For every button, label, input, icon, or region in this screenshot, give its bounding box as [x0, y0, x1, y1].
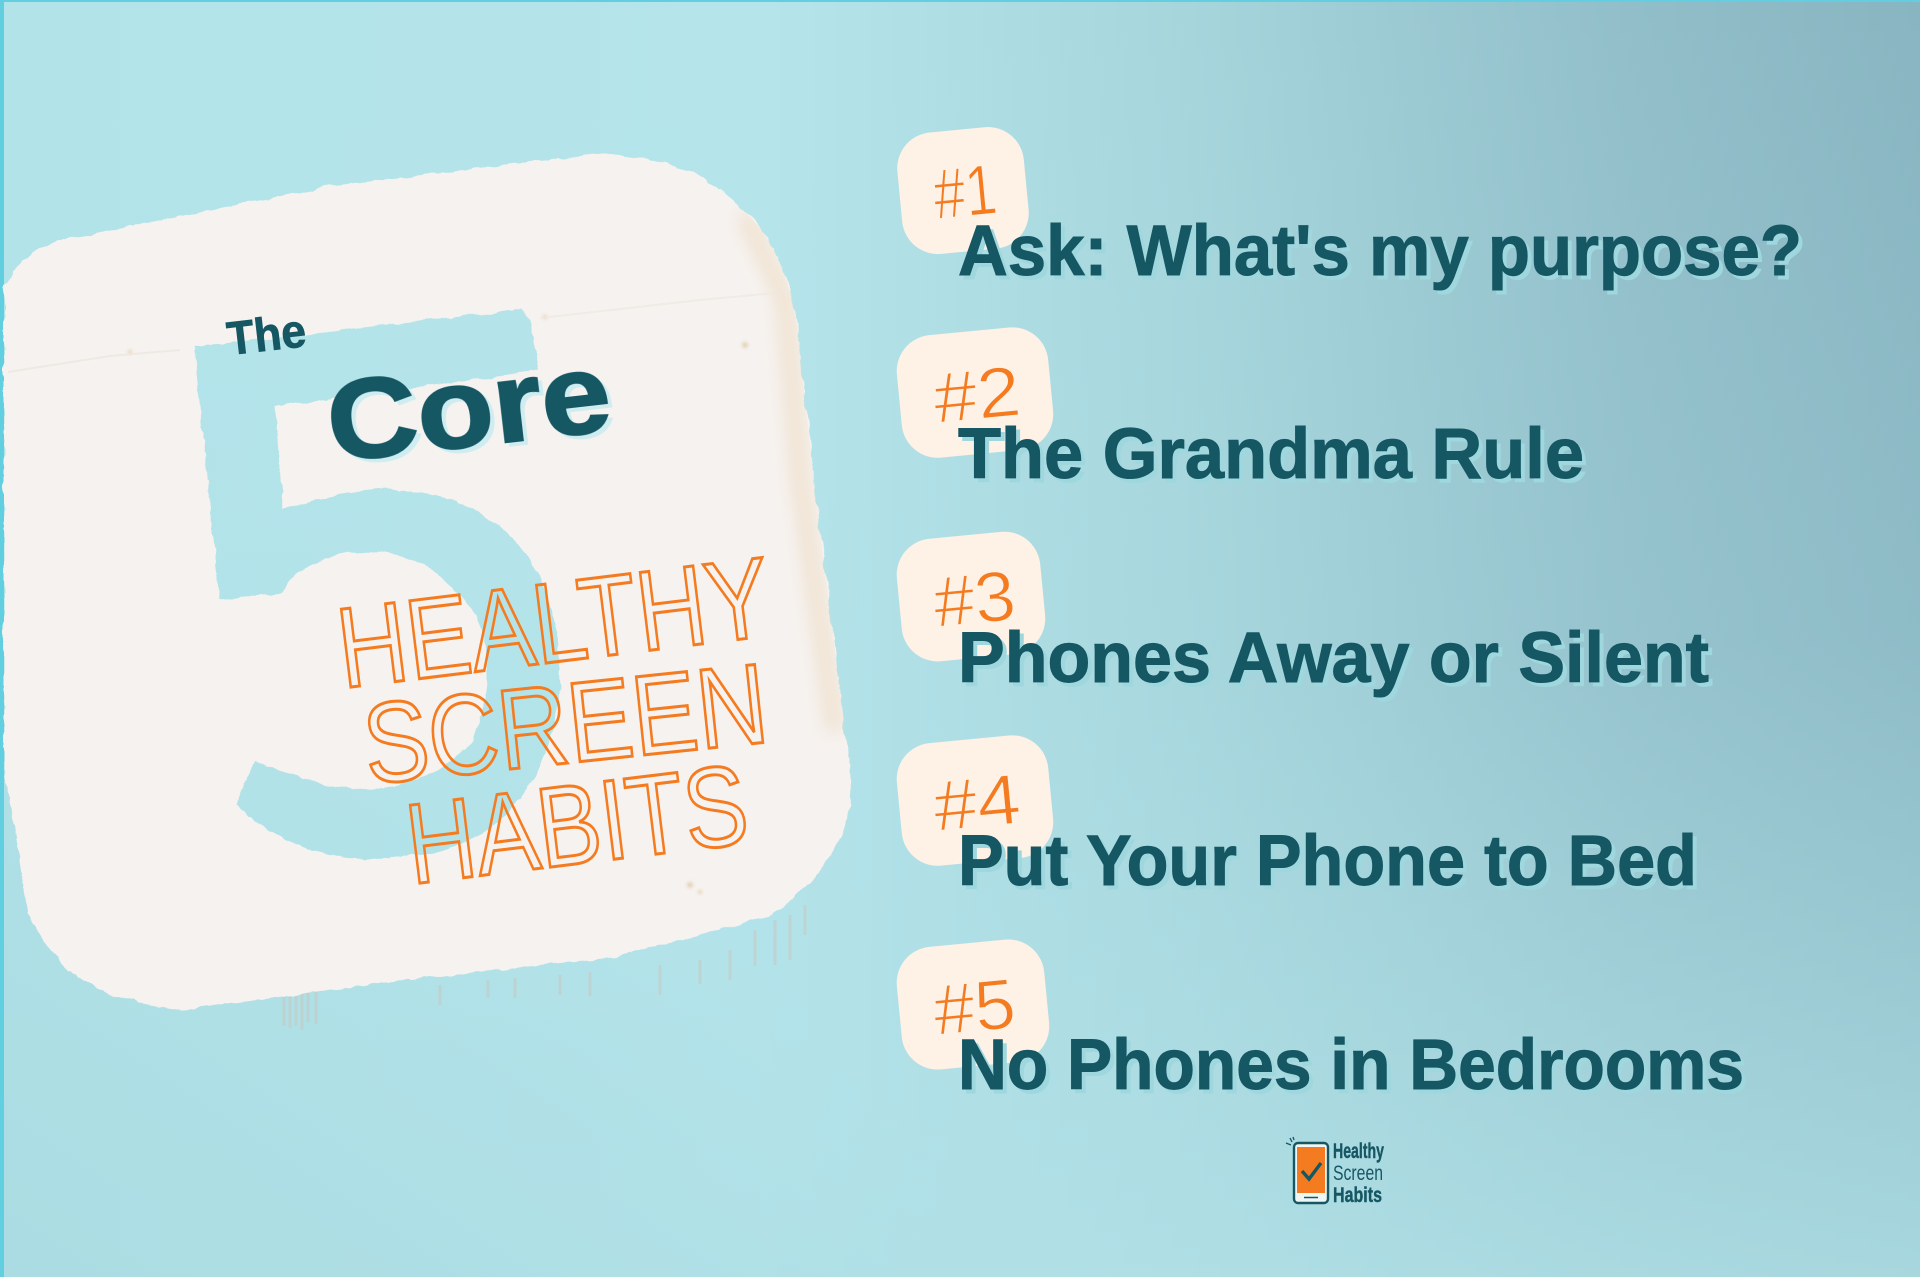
number 3: #3: [930, 556, 1019, 643]
heading: Healthy Screen Habits: [331, 534, 777, 909]
number 2: #2: [930, 352, 1024, 439]
icon: phone with check: [1286, 1137, 1328, 1203]
white block with stencilled five: [4, 153, 851, 1010]
logo text: Healthy: [1333, 1140, 1384, 1163]
heading: Healthy Screen Habits: HEALTHY: [331, 534, 777, 713]
habit 1: [894, 124, 1802, 291]
logo text: Habits: [1333, 1184, 1382, 1207]
habit 4: [893, 732, 1697, 901]
badge 5: [893, 936, 1053, 1073]
number 4: #4: [930, 760, 1024, 847]
habit text 5: No Phones in Bedrooms: [958, 1026, 1744, 1105]
badge 3: [893, 528, 1049, 665]
badge 2: [893, 324, 1057, 461]
habit text 4: Put Your Phone to Bed: [958, 822, 1697, 901]
heading: The: The: [224, 303, 309, 365]
habit 2: [893, 324, 1584, 494]
logo text: Screen: [1333, 1162, 1383, 1185]
logo text: [1333, 1140, 1384, 1207]
habit 5: [893, 936, 1744, 1105]
habit 3: [893, 528, 1709, 698]
number 5: #5: [930, 964, 1019, 1051]
badge 1: [894, 124, 1032, 257]
heading: Healthy Screen Habits: HABITS: [400, 741, 754, 909]
habit text 1: Ask: What's my purpose?: [958, 212, 1802, 291]
habit text 3: Phones Away or Silent: [958, 619, 1709, 698]
paint drips: [284, 905, 805, 1030]
habit text 2: The Grandma Rule: [958, 415, 1584, 494]
badge 4: [893, 732, 1057, 869]
number 1: #1: [930, 150, 1000, 235]
heading: Core: Core: [320, 329, 617, 486]
heading: Healthy Screen Habits: SCREEN: [357, 640, 773, 809]
tan edge staining: [745, 215, 835, 730]
speckles: [128, 315, 748, 894]
logo: Healthy Screen Habits: [1286, 1137, 1384, 1207]
panel: painted white number 5 block: [4, 153, 851, 1030]
